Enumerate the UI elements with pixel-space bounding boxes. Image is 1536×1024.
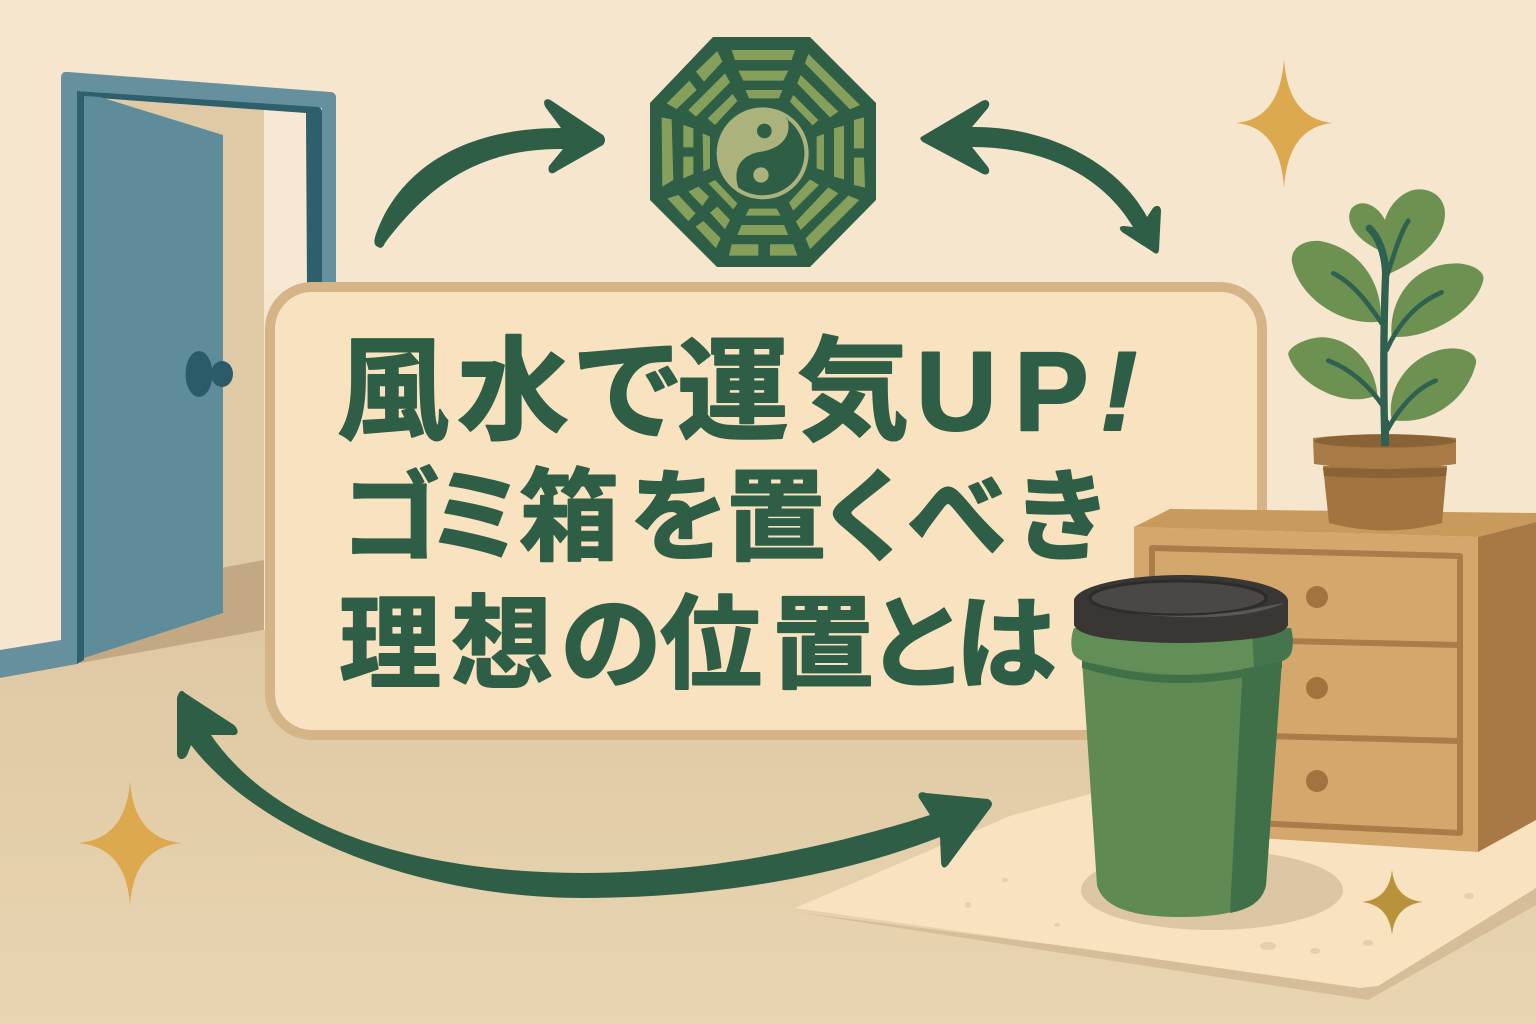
floor xyxy=(0,630,1536,1024)
bin body shaded side xyxy=(1230,660,1282,913)
pot rim shadow xyxy=(1323,468,1447,478)
rug xyxy=(795,790,1536,1000)
sparkle on rug xyxy=(1362,870,1423,935)
plant xyxy=(1288,189,1483,443)
door leaf xyxy=(84,96,223,658)
door floor shadow xyxy=(80,560,264,663)
rug surface xyxy=(795,790,1536,988)
bin rim underside xyxy=(1082,660,1282,683)
title line 2: ゴミ箱を置くべき xyxy=(341,462,1112,574)
door knob xyxy=(186,351,233,397)
bagua octagon xyxy=(650,37,876,267)
title line 1: 風水で運気UP xyxy=(337,329,1089,454)
rug shadow edge xyxy=(795,885,1536,1000)
door frame xyxy=(0,72,336,678)
drawer frame xyxy=(1152,548,1460,833)
title text xyxy=(337,329,1137,702)
trigram bars xyxy=(662,50,865,256)
plant leaves xyxy=(1288,189,1483,421)
rug speckles xyxy=(965,878,1474,954)
arrow: bagua to trash bin xyxy=(920,100,1161,254)
bin lid xyxy=(1074,575,1288,643)
bin lid highlight xyxy=(1120,603,1285,617)
arrow: door to trash bin along floor xyxy=(177,691,992,898)
trash bin xyxy=(1071,575,1343,930)
plant stem and veins xyxy=(1328,221,1442,443)
plant pot xyxy=(1313,420,1456,530)
arrow: door to bagua xyxy=(374,99,605,248)
title panel xyxy=(270,287,1262,735)
dresser front xyxy=(1134,527,1478,852)
door frame inner shadow xyxy=(77,91,322,664)
drawer dividers xyxy=(1152,638,1460,741)
pot soil xyxy=(1314,434,1456,448)
sparkle top right xyxy=(1236,59,1333,188)
door opening wall xyxy=(84,92,264,570)
yin yang symbol xyxy=(717,107,809,199)
dresser side xyxy=(1478,522,1536,852)
bin shadow xyxy=(1081,850,1343,930)
pot rim xyxy=(1313,434,1456,469)
bin rim xyxy=(1071,628,1293,674)
pot body xyxy=(1323,466,1447,530)
drawer knobs xyxy=(1306,586,1328,792)
bin rim shaded side xyxy=(1252,628,1293,668)
bin lid top recess xyxy=(1090,581,1266,615)
dresser xyxy=(1134,509,1536,852)
title line 1: ! xyxy=(1100,329,1137,454)
dresser top xyxy=(1134,509,1536,537)
door illustration xyxy=(0,72,336,678)
sparkle bottom left xyxy=(78,781,182,905)
title line 3: 理想の位置とは xyxy=(339,588,1057,702)
bin body xyxy=(1082,660,1282,917)
octagon base xyxy=(650,37,876,267)
stem base xyxy=(1381,420,1389,446)
